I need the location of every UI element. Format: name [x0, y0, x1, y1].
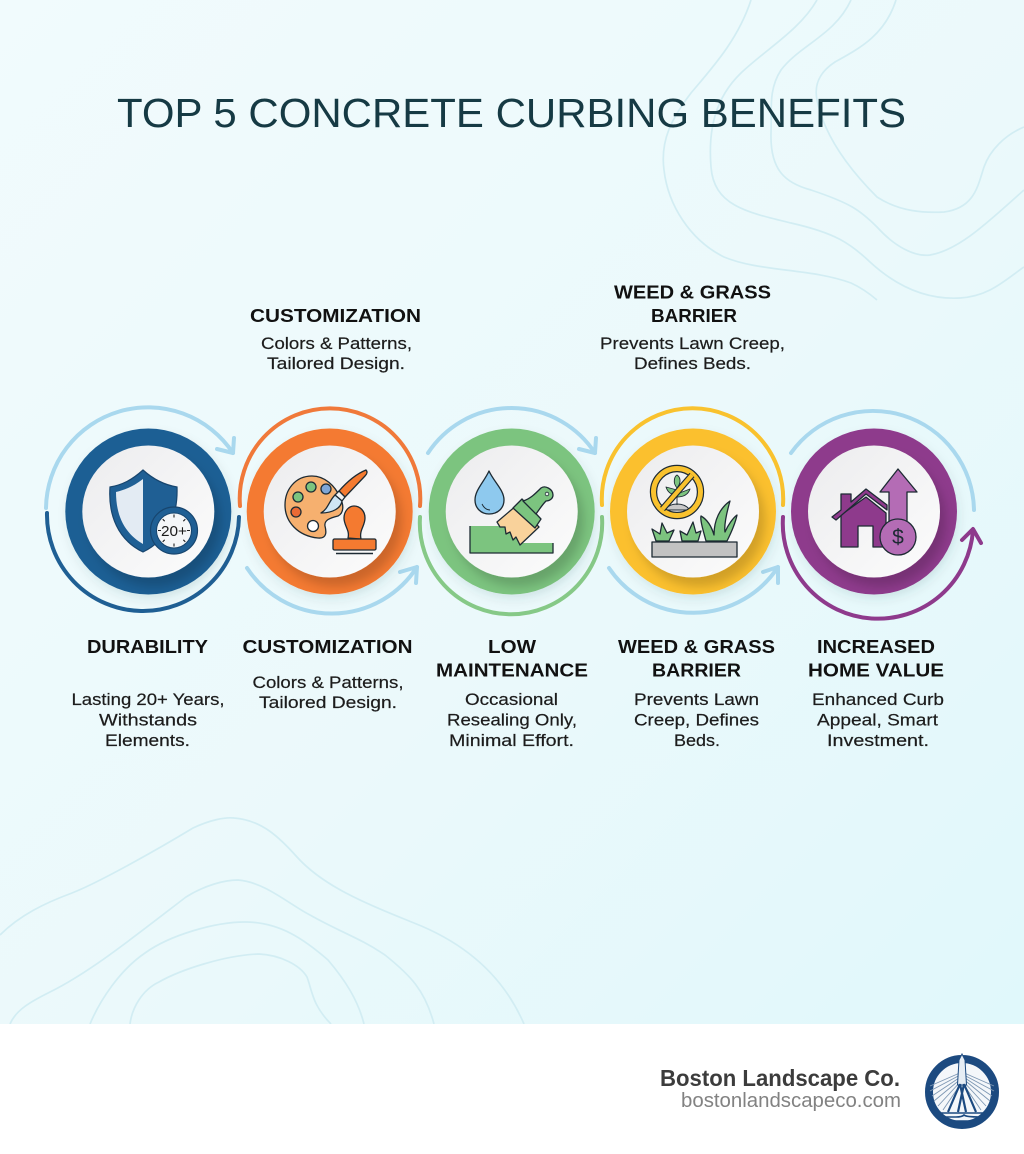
label: customization: CUSTOMIZATION	[242, 636, 412, 657]
label: increased home value: Investment.	[827, 732, 929, 750]
white disc	[264, 446, 396, 578]
ring	[610, 428, 776, 594]
upper label: weed and grass barrier: BARRIER	[651, 305, 738, 326]
step 3: low maintenance	[420, 408, 602, 614]
icon: shield with 20+ clock: 20+	[161, 523, 187, 540]
icon: water drop and paint brush	[470, 471, 553, 553]
contour lines bottom left	[0, 818, 524, 1024]
label: weed and grass barrier: Beds.	[674, 732, 720, 750]
brand url: bostonlandscapeco.com	[681, 1090, 901, 1112]
ring	[791, 428, 957, 594]
label: increased home value: Enhanced Curb	[812, 691, 944, 709]
label: customization: Tailored Design.	[259, 694, 397, 712]
label: weed and grass barrier	[618, 636, 775, 750]
label: increased home value: INCREASED	[817, 636, 935, 657]
brand name: Boston Landscape Co.	[660, 1065, 900, 1091]
title: TOP 5 CONCRETE CURBING BENEFITS	[117, 90, 906, 136]
footer panel	[0, 1024, 1024, 1154]
upper label: customization: CUSTOMIZATION	[250, 305, 421, 326]
label: low maintenance: LOW	[488, 636, 536, 657]
upper label: customization: Colors & Patterns,	[261, 335, 412, 353]
label: low maintenance	[436, 636, 588, 750]
icon: palette, brush and stamp	[285, 470, 376, 554]
ring	[65, 428, 231, 594]
icon: house, rising arrow and dollar coin: $	[892, 526, 904, 549]
label: low maintenance: Occasional	[465, 691, 558, 709]
label: low maintenance: MAINTENANCE	[436, 660, 588, 680]
arc arrow over durability	[46, 407, 234, 508]
arc arrow under customization	[247, 567, 417, 614]
icon: no-weed sign, grass and curb	[652, 468, 737, 557]
upper label: weed and grass barrier: WEED & GRASS	[614, 282, 771, 302]
label: durability: DURABILITY	[87, 636, 209, 657]
upper label: weed and grass barrier: Defines Beds.	[634, 355, 751, 373]
label: weed and grass barrier: Prevents Lawn	[634, 691, 759, 709]
label: durability: Withstands	[99, 712, 197, 730]
arc over customization	[240, 408, 420, 506]
label: customization: Colors & Patterns,	[252, 674, 404, 692]
white disc	[446, 446, 578, 578]
ring	[247, 428, 413, 594]
step 4: weed and grass barrier	[602, 408, 783, 613]
label: durability: Elements.	[105, 732, 190, 750]
logo: bridge emblem	[929, 1054, 995, 1125]
step 2: customization	[240, 408, 420, 614]
label: low maintenance: Resealing Only,	[447, 712, 577, 730]
label: increased home value	[808, 636, 944, 750]
arc arrow under home value	[783, 517, 981, 619]
upper label: weed and grass barrier	[600, 282, 785, 373]
white disc	[627, 446, 759, 578]
label: durability	[72, 636, 224, 750]
contour lines top right	[663, 0, 1024, 300]
upper label: weed and grass barrier: Prevents Lawn Creep,	[600, 335, 785, 353]
step 5: increased home value	[783, 411, 981, 619]
ring	[429, 428, 595, 594]
icon: shield with 20+ clock	[110, 470, 198, 554]
label: weed and grass barrier: BARRIER	[652, 660, 742, 680]
arc over home value	[791, 411, 974, 510]
label: increased home value: HOME VALUE	[808, 660, 944, 680]
arc under durability	[47, 513, 239, 611]
upper label: customization: Tailored Design.	[267, 355, 405, 373]
white disc	[82, 446, 214, 578]
label: customization	[242, 636, 412, 712]
arc arrow under weed barrier	[609, 567, 778, 613]
arc over weed barrier	[602, 408, 783, 505]
step 1: durability	[46, 407, 239, 611]
label: weed and grass barrier: WEED & GRASS	[618, 636, 775, 657]
white disc	[808, 446, 940, 578]
label: weed and grass barrier: Creep, Defines	[634, 712, 759, 730]
arc under low maintenance	[420, 517, 602, 614]
label: low maintenance: Minimal Effort.	[449, 732, 574, 750]
label: increased home value: Appeal, Smart	[817, 712, 939, 730]
icon: house, rising arrow and dollar coin	[832, 469, 917, 555]
label: durability: Lasting 20+ Years,	[72, 691, 224, 709]
upper label: customization	[250, 305, 421, 373]
arc arrow over low maintenance	[428, 408, 596, 453]
